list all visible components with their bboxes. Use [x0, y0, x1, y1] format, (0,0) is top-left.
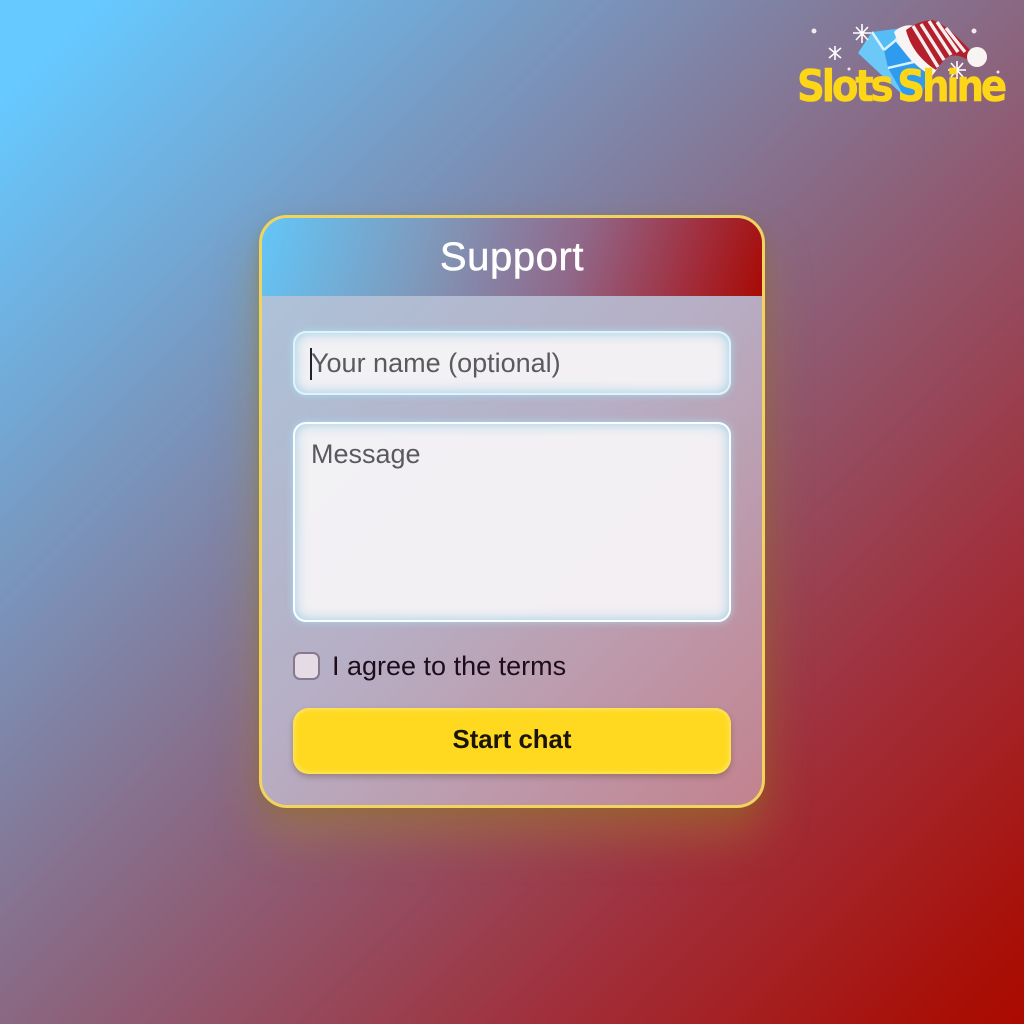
checkbox label: I agree to the terms: [332, 651, 566, 681]
card header: [262, 218, 762, 296]
textarea: message: [293, 422, 731, 622]
panel: support form card: [259, 215, 765, 808]
textarea: message: Message: [311, 439, 421, 469]
button: start chat: Start chat: [452, 726, 571, 754]
checkbox: [293, 652, 320, 680]
button: start chat: [293, 708, 731, 774]
logo wordmark: Slots Shine: [797, 61, 1004, 112]
placeholder: your name: Your name (optional): [311, 348, 561, 378]
heading: Support: Support: [440, 235, 584, 279]
text cursor: [310, 348, 312, 380]
input: your name: [293, 331, 731, 395]
logo: Slots Shine: [797, 20, 1006, 112]
icon: diamond with santa hat and snowflakes: [812, 20, 1000, 95]
